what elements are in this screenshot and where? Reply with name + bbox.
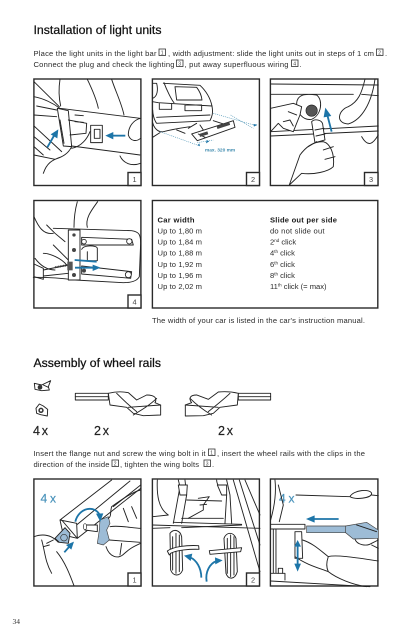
icon: flange nut [36, 404, 48, 416]
panel: step 1 wing bolt: 1 [132, 576, 137, 584]
table column: car width [158, 216, 202, 291]
text block: light unit instructions: Connect the plug and check the lighting [34, 60, 174, 69]
panel: step 3 plug connection: 3 [369, 175, 373, 184]
text block: wheel rail instructions [34, 449, 365, 469]
panel: step 3 tighten wing bolts: 4 x [279, 492, 294, 506]
panel: step 1 light unit in bar [34, 79, 141, 186]
table column: slide out per side: 4 [270, 249, 274, 258]
label: quantities [33, 424, 234, 438]
table column: slide out per side: Slide out per side [270, 216, 337, 224]
panel: step 1 wing bolt [34, 479, 141, 586]
panel: step 2 wheel rails on wheels [152, 479, 260, 586]
text block: wheel rail instructions: , insert the wheel rails with the clips in the [217, 449, 365, 458]
heading: assembly of wheel rails: Assembly of wheel rails [34, 356, 161, 370]
panel: car width table [152, 200, 378, 308]
table column: slide out per side: th [274, 271, 278, 276]
table column: slide out per side: nd [274, 238, 280, 243]
table column: car width: Up to 1,88 m [158, 249, 202, 258]
panel: step 2 car and light bar, max 320 mm [152, 79, 260, 186]
text block: wheel rail instructions: Insert the flange nut and screw the wing bolt in it [34, 449, 206, 458]
table column: slide out per side: th [278, 282, 282, 288]
text block: wheel rail instructions: . [212, 460, 214, 469]
table column: slide out per side: click [278, 260, 295, 269]
table column: slide out per side [270, 216, 337, 291]
table column: slide out per side: 2 [270, 238, 274, 246]
table column: car width: Car width [158, 216, 195, 224]
table column: slide out per side: click (= max) [282, 282, 327, 291]
panel: step 4 width adjustment: 4 [132, 298, 137, 306]
table column: slide out per side: 11 [270, 282, 278, 291]
table column: car width: Up to 1,96 m [158, 271, 202, 280]
table column: slide out per side: th [274, 249, 278, 254]
table column: car width: Up to 2,02 m [158, 282, 202, 291]
icon: left wheel rail [75, 392, 161, 416]
label: quantities: 4 x [33, 424, 49, 438]
heading: installation of light units: Installation of light units [34, 23, 162, 37]
table column: slide out per side: 6 [270, 260, 274, 269]
panel: step 2 car and light bar, max 320 mm: 2 [251, 175, 255, 184]
table column: car width: Up to 1,84 m [158, 238, 202, 246]
panel: step 3 plug connection [270, 79, 378, 186]
text block: light unit instructions: . [385, 49, 387, 58]
panel: step 2 wheel rails on wheels: 2 [251, 576, 255, 584]
table column: car width: Up to 1,92 m [158, 260, 202, 269]
text block: light unit instructions: 1 [161, 50, 164, 56]
label: quantities: 2 x [218, 424, 234, 438]
text block: light unit instructions: 3 [178, 62, 181, 68]
text block: light unit instructions: 2 [378, 50, 381, 56]
text block: wheel rail instructions: direction of the inside [34, 460, 110, 469]
table column: car width: Up to 1,80 m [158, 226, 202, 236]
table column: slide out per side: click [278, 249, 295, 258]
page number: 34 [12, 617, 20, 626]
text block: table note: The width of your car is listed in the car's instruction manual. [152, 316, 365, 325]
panel: step 1 wing bolt: 4 x [40, 492, 56, 506]
text block: light unit instructions: . [300, 60, 302, 69]
text block: light unit instructions: 4 [293, 62, 296, 68]
panel: step 1 light unit in bar: 1 [132, 175, 137, 184]
text block: light unit instructions: , put away superfluous wiring [184, 60, 288, 69]
table column: slide out per side: click [278, 271, 295, 280]
icon: wing bolt [34, 381, 51, 391]
text block: light unit instructions: , width adjustment: slide the light units out in steps of 1 cm [168, 49, 374, 58]
table column: slide out per side: th [274, 260, 278, 265]
text block: wheel rail instructions: 2 [114, 462, 117, 468]
label: quantities: 2 x [94, 424, 110, 438]
text block: light unit instructions [34, 49, 387, 69]
table column: slide out per side: 8 [270, 271, 274, 280]
table column: slide out per side: click [279, 238, 296, 246]
panel: step 3 tighten wing bolts [270, 479, 378, 587]
table column: slide out per side: do not slide out [270, 226, 325, 236]
panel: step 4 width adjustment [33, 200, 141, 308]
text block: wheel rail instructions: , tighten the wing bolts [120, 460, 199, 469]
text block: wheel rail instructions: 1 [210, 450, 213, 456]
text block: wheel rail instructions: 3 [206, 462, 209, 468]
text block: light unit instructions: Place the light units in the light bar [34, 49, 157, 58]
panel: step 2 car and light bar, max 320 mm: max. 320 mm [205, 148, 235, 154]
icon: right wheel rail [185, 392, 271, 416]
